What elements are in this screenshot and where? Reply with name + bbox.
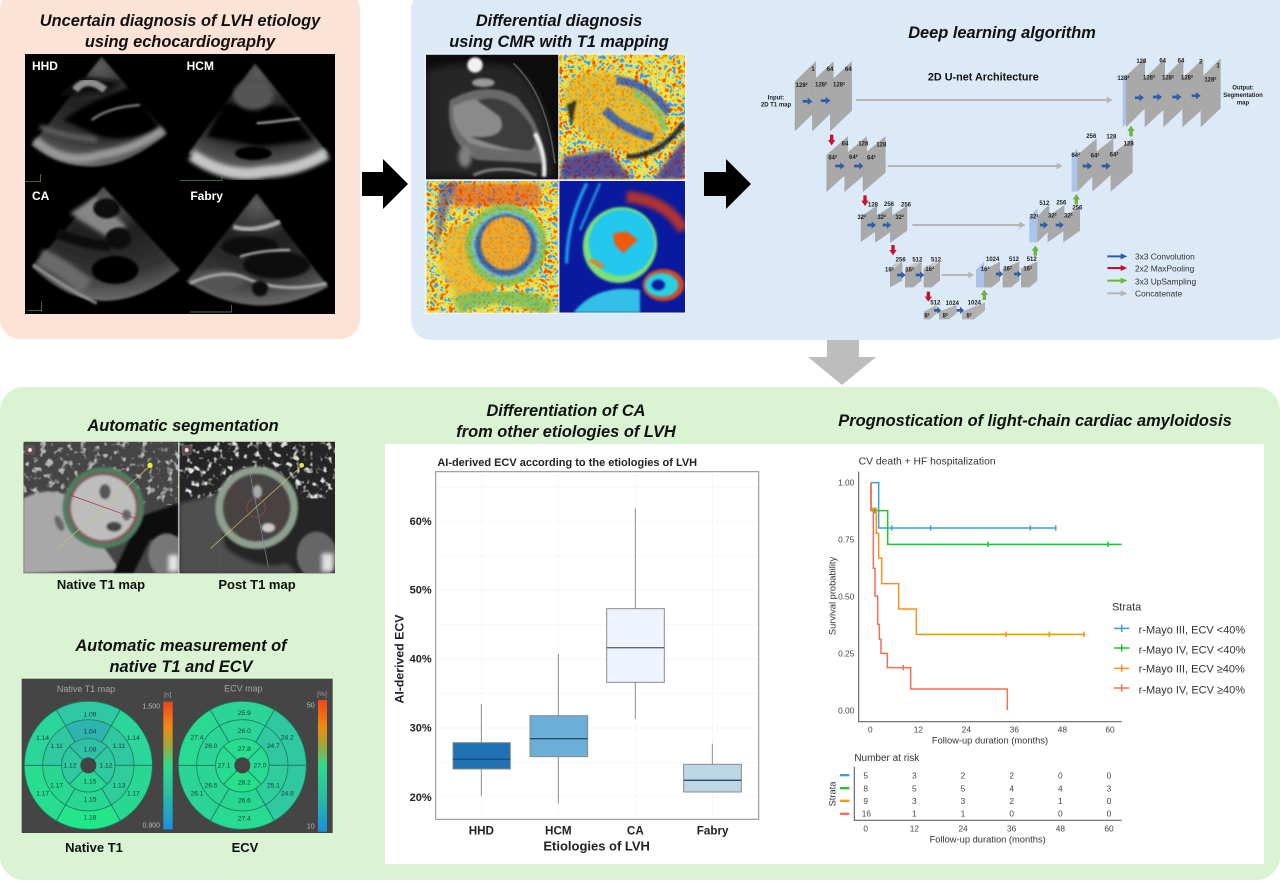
survival y axis ticks: 0.75 (838, 535, 855, 545)
unet: decoder level 2 (1072, 138, 1133, 192)
risk table x ticks: 48 (1056, 824, 1065, 834)
bullseye: ECV: 24.8 (281, 791, 294, 798)
unet: channel and size labels: 16² (1003, 266, 1012, 273)
unet: encoder level 3 (861, 206, 907, 242)
echo: CA (32, 187, 180, 303)
bullseye: native T1: 1.14 (127, 735, 140, 742)
risk table x axis title: Follow-up duration (months) (930, 834, 1046, 844)
risk table x ticks: 36 (1007, 824, 1017, 834)
survival x axis ticks: 36 (1010, 724, 1019, 734)
echo: Fabry (187, 193, 328, 305)
heading: prognostication: Prognostication of light-chain cardiac amyloidosis (838, 412, 1232, 430)
heading: differential diagnosis: Differential diagnosis (476, 12, 642, 30)
y axis labels: 60% (410, 516, 432, 528)
bullseye: ECV: 26.0 (205, 743, 218, 750)
heading: differential diagnosis: using CMR with T1 mapping (449, 33, 669, 51)
unet: legend: Concatenate (1135, 289, 1183, 299)
heading: differentiation of CA: from other etiologies of LVH (456, 423, 677, 441)
bullseye: native T1 (24, 701, 152, 829)
risk table numbers: 0 (1107, 770, 1112, 780)
CMR: long-axis cine (426, 55, 558, 179)
survival chart (827, 457, 1246, 844)
echo label: HHD: HHD (32, 59, 58, 73)
unet: channel and size labels: 512 (1009, 257, 1020, 263)
unet: concatenate arrows (856, 97, 1113, 278)
unet: channel and size labels: 128² (1162, 74, 1174, 81)
unet: channel and size labels: 64 (845, 67, 852, 73)
CMR: T1 map short axis (427, 181, 558, 313)
risk table numbers: 9 (863, 796, 868, 806)
unet: output label: map (1237, 100, 1249, 106)
risk table numbers: 1 (1058, 796, 1063, 806)
bullseye: native T1: 1.17 (36, 790, 49, 797)
unet: channel and size labels: 256 (1086, 134, 1097, 140)
risk table numbers: 0 (1009, 809, 1014, 819)
unet: channel and size labels: 8² (966, 313, 972, 320)
survival legend: r-Mayo IV, ECV ≥40% (1139, 684, 1245, 696)
unet: channel and size labels: 64² (1110, 152, 1118, 159)
x axis labels: HCM (545, 825, 572, 838)
heading: automatic measurement: native T1 and ECV (109, 658, 255, 676)
risk table x ticks: 60 (1104, 824, 1114, 834)
unet: encoder level 4 (890, 262, 940, 287)
unet: channel and size labels: 32² (877, 214, 886, 221)
risk table numbers: 0 (1107, 809, 1112, 819)
bullseye: ECV (178, 701, 306, 829)
risk table x ticks: 12 (910, 824, 919, 834)
unet: channel and size labels: 32² (1048, 213, 1057, 220)
echo: HHD (32, 57, 167, 167)
curve: r-Mayo IV, ECV under 40% (871, 483, 1122, 547)
unet: channel and size labels: 32² (857, 214, 866, 221)
survival legend: r-Mayo III, ECV <40% (1139, 625, 1245, 637)
heading: uncertain diagnosis: Uncertain diagnosis of LVH etiology (40, 12, 320, 30)
bullseye: native T1: 1.14 (36, 735, 49, 742)
risk table numbers: 5 (961, 783, 966, 793)
risk table numbers: 4 (1009, 783, 1014, 793)
survival title: CV death + HF hospitalization (859, 457, 996, 468)
risk table x ticks (863, 824, 1114, 834)
risk table numbers: 0 (1058, 809, 1063, 819)
y axis labels: 50% (410, 585, 432, 597)
survival legend: Strata (1112, 602, 1142, 614)
risk table numbers: 5 (912, 783, 917, 793)
unet: output label: Output: (1232, 86, 1254, 92)
risk table numbers (862, 770, 1112, 819)
arrow: down to applications (808, 340, 876, 385)
bullseye: native T1: 1.04 (84, 729, 97, 736)
risk table x ticks: 0 (863, 824, 868, 834)
label: ECV: ECV (232, 840, 259, 855)
bullseye: native T1: 1.17 (127, 790, 140, 797)
risk table numbers: 2 (961, 770, 966, 780)
curve: r-Mayo III, ECV under 40% (871, 483, 1057, 531)
white chart area (385, 444, 1264, 864)
box plot title: AI-derived ECV according to the etiologies of LVH (437, 457, 697, 469)
unet: channel and size labels: 128² (796, 82, 808, 89)
unet: input label: Input: (768, 95, 784, 101)
unet: channel and size labels: 1024 (968, 300, 982, 306)
unet: channel and size labels: 128² (815, 81, 827, 88)
map title: native T1: Native T1 map (57, 684, 115, 694)
bullseye: native T1: 1.18 (84, 814, 97, 821)
bullseye: ECV: 27.0 (254, 763, 267, 770)
unet: channel and size labels: 128² (1204, 77, 1216, 84)
unet: channel and size labels: 64 (827, 67, 834, 73)
survival y axis ticks: 0.50 (838, 592, 855, 602)
echo: HCM (188, 63, 328, 175)
unet: encoder level 1 (795, 62, 852, 131)
colour bar: ECV: 50 (307, 703, 315, 710)
box: HCM (530, 654, 588, 803)
heading: differentiation of CA: Differentiation of CA (486, 402, 646, 420)
curve: r-Mayo IV, ECV 40% or more (871, 483, 1007, 710)
echo label: HCM: HCM (187, 59, 214, 73)
survival y axis ticks: 0.25 (838, 649, 855, 659)
bullseye: native T1: 1.15 (84, 797, 97, 804)
y axis labels: 40% (410, 654, 432, 666)
unet: legend: 3x3 UpSampling (1135, 277, 1196, 287)
unet: channel and size labels: 64² (1071, 152, 1080, 159)
unet: channel and size labels: 128 (1106, 135, 1117, 141)
survival x axis ticks (868, 724, 1115, 734)
survival x axis ticks: 12 (914, 724, 923, 734)
survival y axis ticks: 0.00 (838, 706, 855, 716)
bullseye: ECV: 28.2 (238, 779, 251, 786)
unet: channel and size labels: 128² (833, 82, 845, 89)
unet: channel and size labels: 1 (1216, 64, 1220, 70)
echocardiography images (25, 54, 335, 314)
unet: channel and size labels: 64² (828, 154, 837, 161)
bullseye: ECV: 27.1 (218, 763, 231, 770)
y axis title: AI-derived ECV (393, 614, 407, 704)
unet: channel and size labels: 256 (1072, 206, 1083, 212)
bullseye: native T1: 1.09 (84, 711, 97, 718)
map title: ECV: ECV map (224, 683, 263, 693)
curve: r-Mayo III, ECV 40% or more (871, 483, 1085, 637)
colour bar: native T1: [s] (164, 692, 171, 699)
unet: convolution arrows (803, 92, 1201, 314)
unet: decoder level 3 (1029, 204, 1080, 242)
unet: channel and size labels: 8² (924, 312, 930, 319)
y axis labels: 30% (410, 723, 432, 735)
unet: channel and size labels: 1 (811, 67, 815, 73)
bullseye: native T1: 1.08 (84, 747, 97, 754)
box: CA (607, 508, 664, 719)
label: native T1: Native T1 (65, 840, 123, 855)
unet: channel and size labels: 64² (867, 154, 876, 161)
unet: channel and size labels: 128 (1136, 59, 1147, 65)
panel: uncertain diagnosis (echocardiography) (0, 0, 360, 339)
unet: channel and size labels: 1024 (946, 301, 960, 307)
colour bar: ECV: [%] (317, 691, 327, 698)
CMR: T1 map long axis (550, 55, 685, 179)
echo label: Fabry: Fabry (190, 189, 223, 203)
bullseye: native T1: 1.11 (113, 743, 126, 750)
box plot: AI-derived ECV (393, 457, 759, 854)
unet: channel and size labels: 128² (1117, 75, 1129, 82)
CMR: ECV map (559, 181, 685, 313)
unet: channel and size labels: 32² (1030, 214, 1038, 221)
risk table colour keys (840, 774, 849, 815)
colour bar: ECV: 10 (307, 823, 315, 830)
bullseye: ECV: 26.6 (238, 797, 251, 804)
risk table numbers: 2 (1009, 770, 1014, 780)
bullseye: ECV: 25.1 (267, 783, 280, 790)
unet: channel and size labels: 256 (1056, 200, 1067, 206)
risk table numbers: 2 (1009, 796, 1014, 806)
unet: channel and size labels: 512 (912, 258, 923, 264)
unet: channel and size labels: 128² (1143, 75, 1155, 82)
box: Fabry (684, 744, 741, 792)
bullseye: ECV: 26.0 (238, 728, 251, 735)
risk table numbers: 0 (1058, 770, 1063, 780)
colour bar: ECV (307, 691, 327, 832)
unet: channel and size labels: 1024 (986, 257, 1000, 263)
unet: channel and size labels: 16² (925, 266, 934, 273)
unet: diagram title: 2D U-net Architecture (928, 72, 1039, 84)
risk table x ticks: 24 (958, 824, 968, 834)
unet: up-sampling arrows (981, 126, 1135, 300)
bullseye maps panel (22, 679, 333, 833)
unet: bottleneck (924, 302, 985, 319)
survival x axis ticks: 0 (868, 724, 873, 734)
risk table numbers: 3 (1107, 783, 1112, 793)
survival y axis ticks (838, 478, 855, 716)
survival x axis ticks: 48 (1058, 724, 1067, 734)
bullseye: ECV: 27.4 (191, 735, 204, 742)
unet: output label: Segmentation (1223, 93, 1263, 99)
risk table numbers: 3 (912, 770, 917, 780)
unet: channel and size labels: 512 (1039, 201, 1050, 207)
bullseye: native T1: 1.13 (113, 782, 126, 789)
bullseye: ECV: 26.5 (205, 783, 218, 790)
x axis labels: CA (627, 825, 644, 838)
unet: decoder level 1 (1123, 58, 1221, 127)
survival x axis ticks: 24 (962, 724, 971, 734)
segmentation images (23, 442, 337, 578)
arrow: echo to CMR (362, 159, 408, 209)
survival legend (1112, 602, 1246, 696)
unet: channel and size labels: 128 (858, 141, 869, 147)
x axis labels (469, 825, 729, 838)
unet: channel and size labels: 128 (876, 143, 887, 149)
bullseye: native T1: 1.17 (50, 782, 63, 789)
unet: channel and size labels: 16² (981, 266, 989, 273)
arrow: CMR to deep learning (704, 159, 751, 209)
segmentation: native T1 (23, 442, 185, 577)
unet: channel and size labels: 16² (1023, 265, 1032, 272)
panel: AI applications (0, 387, 1280, 880)
survival y axis title: Survival probability (827, 557, 837, 635)
bullseye: native T1: 1.12 (64, 763, 77, 770)
unet: channel and size labels: 64 (1178, 59, 1185, 65)
segmentation: post T1 (179, 442, 337, 578)
colour bar: native T1: 1.500 (143, 704, 160, 711)
unet: channel and size labels: 128² (1181, 74, 1193, 81)
x axis title: Etiologies of LVH (543, 839, 650, 854)
heading: deep learning algorithm: Deep learning algorithm (908, 24, 1096, 42)
unet: channel and size labels: 32² (895, 214, 904, 221)
risk table numbers: 5 (863, 770, 868, 780)
risk table numbers: 8 (863, 783, 868, 793)
x axis labels: HHD (469, 825, 494, 838)
U-net architecture diagram (761, 58, 1263, 320)
heading: uncertain diagnosis: using echocardiography (85, 33, 276, 51)
unet: channel and size labels: 64² (1091, 152, 1099, 159)
bullseye: ECV: 24.7 (267, 743, 280, 750)
unet: legend: 2x2 MaxPooling (1135, 264, 1195, 274)
bullseye: ECV: 26.1 (191, 791, 204, 798)
unet: channel and size labels: 16² (905, 266, 914, 273)
unet: channel and size labels: 64 (842, 141, 849, 147)
survival x axis ticks: 60 (1105, 724, 1115, 734)
label: post T1 map: Post T1 map (218, 577, 296, 592)
unet: channel and size labels: 512 (931, 258, 942, 264)
risk table numbers: 4 (1058, 783, 1063, 793)
panel: CMR and deep learning (411, 0, 1280, 340)
unet: channel and size labels: 16² (885, 267, 894, 274)
y axis labels (410, 516, 432, 804)
unet: legend: 3x3 Convolution (1135, 251, 1195, 261)
risk table numbers: 3 (961, 796, 966, 806)
heading: automatic measurement: Automatic measurement of (75, 637, 287, 655)
risk table title: Number at risk (854, 753, 919, 764)
colour bar: native T1 (143, 692, 173, 830)
bullseye: ECV: 24.2 (281, 735, 294, 742)
survival legend: r-Mayo III, ECV ≥40% (1139, 664, 1245, 676)
heading: automatic segmentation: Automatic segmentation (86, 417, 279, 435)
y axis labels: 20% (410, 792, 432, 804)
echo label: CA: CA (32, 189, 50, 203)
bullseye: native T1: 1.12 (100, 763, 113, 770)
unet: channel and size labels: 512 (930, 300, 941, 306)
label: native T1 map: Native T1 map (57, 577, 145, 592)
survival x axis title: Follow-up duration (months) (932, 735, 1048, 745)
bullseye: native T1: 1.11 (50, 743, 63, 750)
unet: channel and size labels: 256 (884, 202, 895, 208)
risk table numbers: 3 (912, 796, 917, 806)
risk table numbers: 16 (862, 809, 871, 819)
box: HHD (453, 704, 510, 796)
unet: channel and size labels: 128 (868, 203, 879, 209)
x axis labels: Fabry (697, 825, 729, 838)
CMR images (425, 53, 686, 314)
risk table y axis title: Strata (827, 781, 837, 806)
unet: decoder level 4 (976, 262, 1037, 287)
bullseye: ECV: 27.4 (238, 815, 251, 822)
unet: encoder level 2 (827, 137, 885, 192)
unet: channel and size labels: 256 (901, 203, 912, 209)
unet: channel and size labels: 64 (1159, 59, 1167, 65)
unet: channel and size labels: 64² (849, 154, 858, 161)
risk table numbers: 0 (1107, 796, 1112, 806)
survival y axis ticks: 1.00 (838, 478, 855, 488)
unet: channel and size labels: 512 (1027, 257, 1037, 263)
survival legend: r-Mayo IV, ECV <40% (1139, 644, 1246, 656)
risk table numbers: 1 (961, 809, 966, 819)
unet: channel and size labels: 8² (943, 312, 948, 319)
bullseye: native T1: 1.15 (84, 779, 97, 786)
unet: channel and size labels: 128 (1124, 142, 1134, 148)
unet: input label: 2D T1 map (761, 103, 791, 109)
bullseye: ECV: 27.8 (238, 746, 251, 753)
bullseye: ECV: 25.9 (238, 710, 251, 717)
unet: channel and size labels (796, 59, 1220, 320)
unet: max-pooling arrows (828, 135, 932, 302)
unet: channel and size labels: 256 (896, 257, 906, 263)
unet: legend (1107, 251, 1196, 299)
colour bar: native T1: 0.900 (143, 823, 160, 830)
unet: channel and size labels: 2 (1199, 59, 1203, 65)
risk table numbers: 1 (912, 809, 917, 819)
unet: channel and size labels: 32² (1064, 212, 1073, 219)
